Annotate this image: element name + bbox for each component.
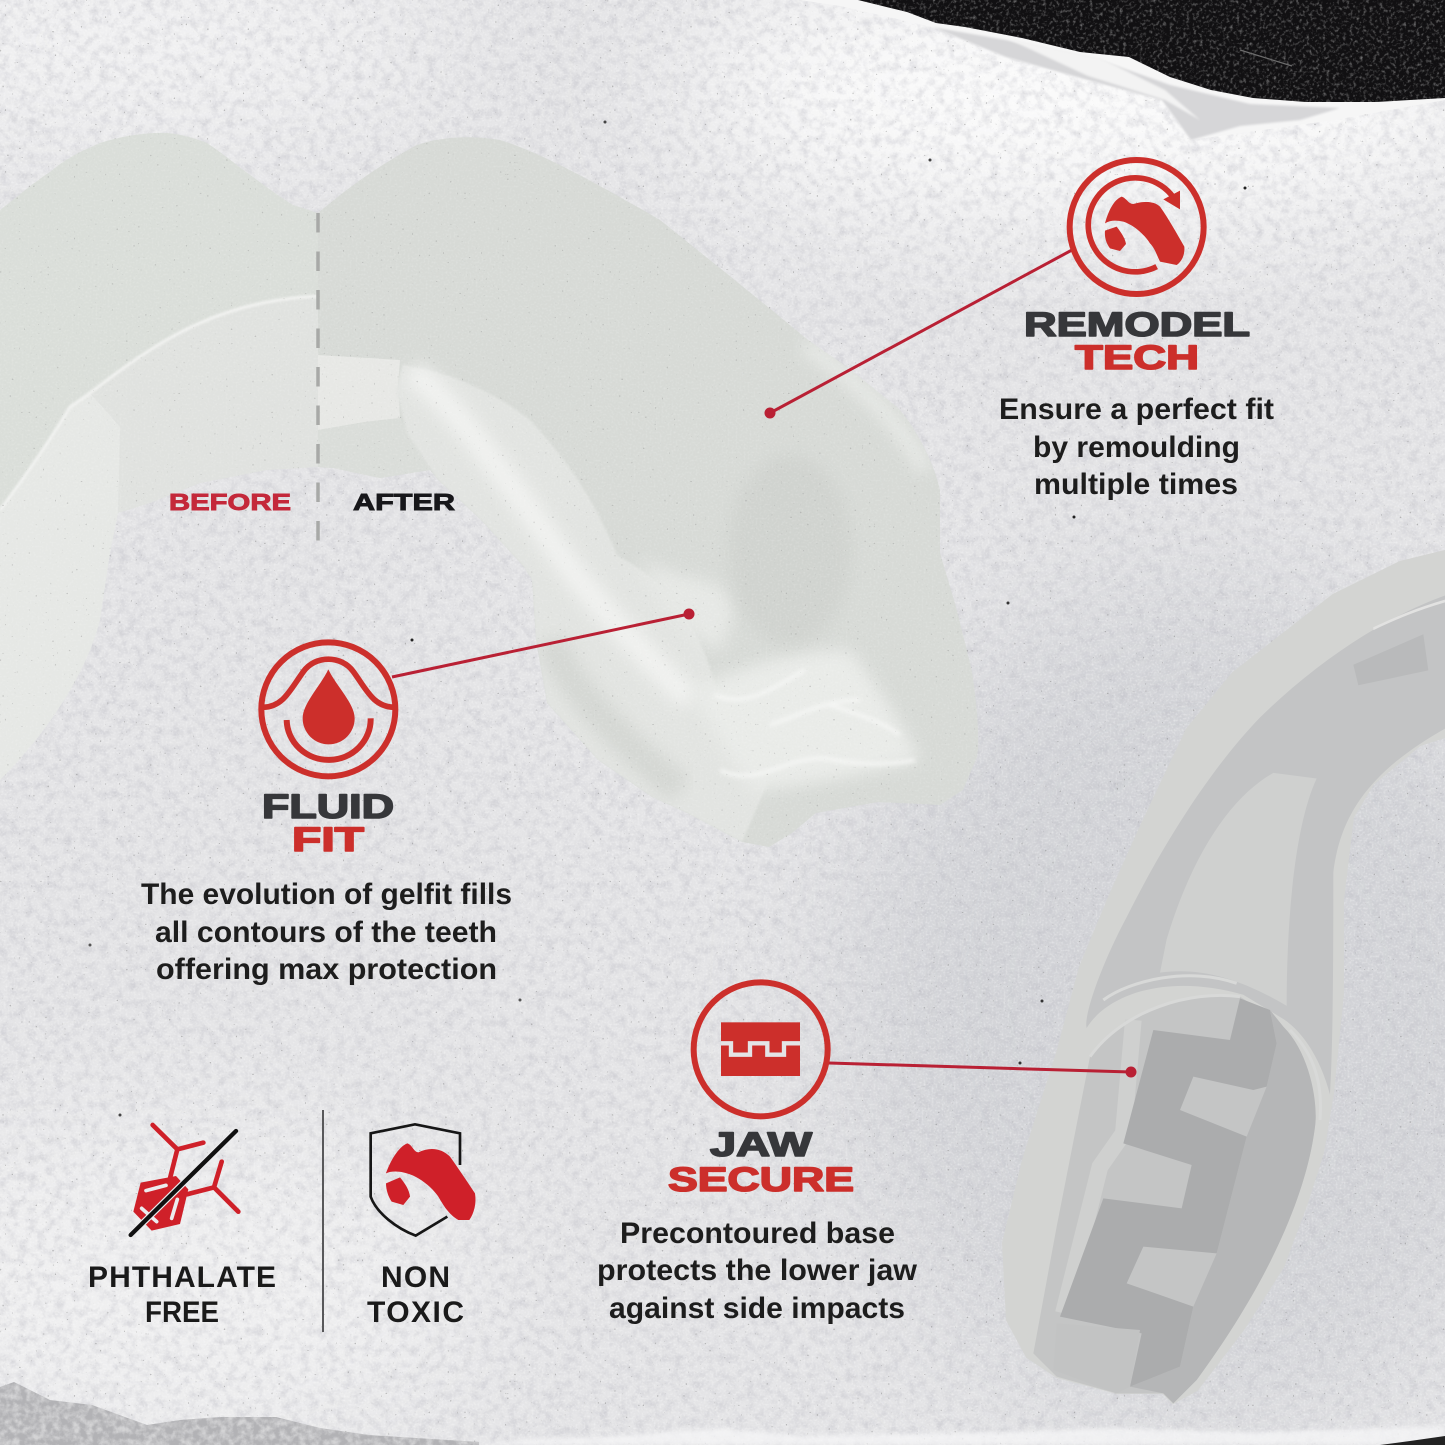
lower body with bite pattern — [1033, 976, 1321, 1403]
text: fluid fit description: all contours of the teeth — [155, 916, 497, 949]
mouthguard image: before and after — [0, 120, 1000, 860]
panel: jaw secure — [597, 982, 918, 1325]
heading: jaw secure: JAW — [710, 1126, 813, 1164]
text: remodel tech description: Ensure a perfect fit — [999, 393, 1274, 426]
icon: fluid fit — [261, 642, 395, 776]
label: phthalate free — [88, 1261, 276, 1329]
heading: remodel tech: REMODEL — [1024, 306, 1250, 344]
after wrinkles — [714, 650, 915, 790]
heading: fluid fit: FIT — [292, 821, 364, 859]
before section left arm — [0, 393, 120, 780]
text: jaw secure description: protects the lower jaw — [597, 1254, 918, 1287]
label: non toxic: NON — [381, 1261, 450, 1294]
mouthguard image: jaw side view — [1003, 551, 1445, 1403]
icon: jaw secure — [694, 982, 828, 1116]
text: jaw secure description — [597, 1217, 918, 1325]
label: after: AFTER — [353, 489, 456, 515]
divider dashed line before/after — [316, 213, 320, 541]
label: non toxic — [367, 1261, 464, 1329]
heading: remodel tech: TECH — [1075, 339, 1199, 377]
text: remodel tech description — [999, 393, 1274, 501]
label: phthalate free: PHTHALATE — [88, 1261, 276, 1294]
callout line: fluid fit — [392, 608, 694, 677]
heading: fluid fit — [262, 788, 394, 859]
after fold — [396, 365, 769, 842]
before section upper surface — [0, 133, 318, 510]
after band — [318, 355, 400, 430]
icon: remodel tech — [1070, 160, 1204, 294]
callout line: jaw secure — [829, 1063, 1136, 1078]
bite teeth — [1060, 998, 1277, 1387]
text: jaw secure description: against side impacts — [609, 1292, 905, 1325]
before section band — [90, 296, 318, 513]
text: fluid fit description — [141, 878, 512, 986]
torn paper bottom edge — [0, 1375, 1445, 1445]
callout line: remodel tech — [764, 250, 1072, 418]
panel: fluid fit — [141, 642, 512, 986]
text: fluid fit description: offering max protection — [156, 953, 497, 986]
icon: shield with mouthguard — [371, 1124, 475, 1236]
after section — [318, 137, 978, 847]
heading: fluid fit: FLUID — [262, 788, 394, 826]
text: remodel tech description: multiple times — [1034, 468, 1238, 501]
upper body — [1086, 595, 1445, 1095]
label: before: BEFORE — [169, 489, 291, 515]
heading: jaw secure: SECURE — [668, 1161, 854, 1199]
panel: remodel tech — [999, 160, 1274, 501]
torn black paper top right — [800, 0, 1445, 140]
vertical divider — [322, 1110, 324, 1332]
panel: phthalate free — [88, 1125, 276, 1329]
text: fluid fit description: The evolution of gelfit fills — [141, 878, 512, 911]
text: jaw secure description: Precontoured base — [620, 1217, 895, 1250]
heading: remodel tech — [1024, 306, 1250, 377]
text: remodel tech description: by remoulding — [1033, 431, 1240, 464]
label: non toxic: TOXIC — [367, 1296, 464, 1329]
icon: crossed out molecule — [131, 1125, 238, 1235]
panel: non toxic — [367, 1124, 475, 1329]
heading: jaw secure — [668, 1126, 854, 1199]
label: phthalate free: FREE — [145, 1296, 219, 1329]
